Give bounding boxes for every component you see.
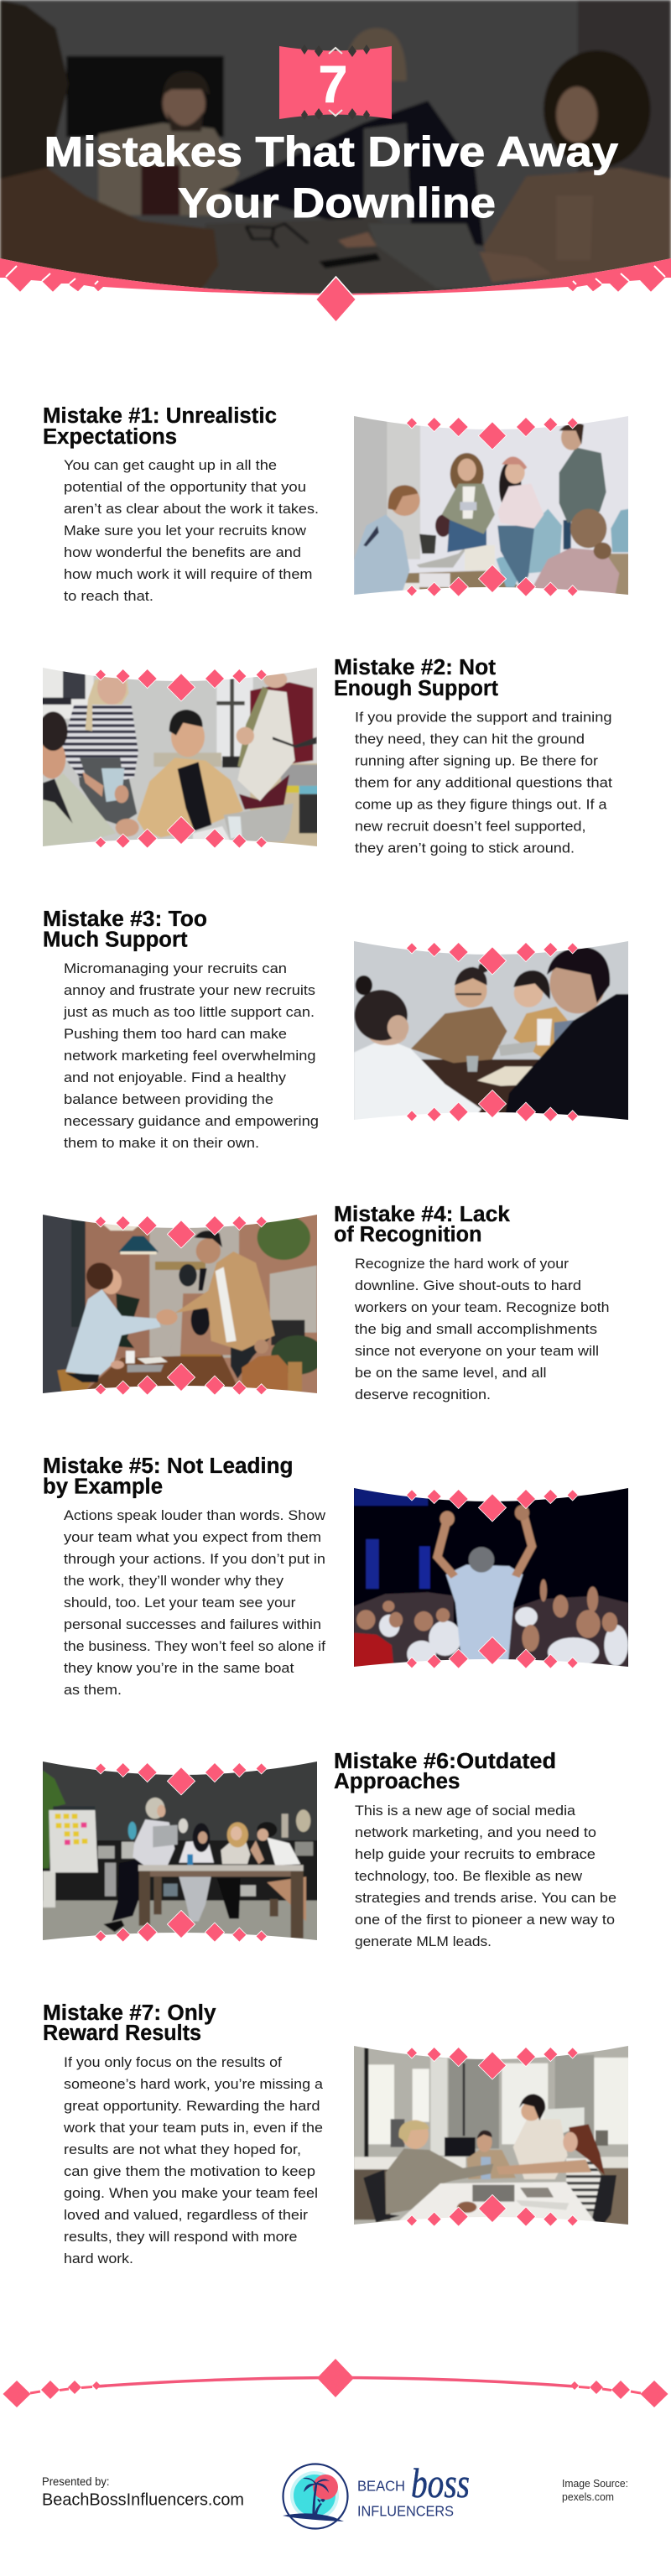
header curved band [0,258,671,295]
body text: mistake 1: how much work it will require of them [64,567,312,582]
icon: header centre diamond [317,278,356,321]
body text: mistake 1: Make sure you let your recruits know [64,523,306,539]
body text: mistake 3: necessary guidance and empowering [64,1114,319,1129]
body text: mistake 3: Micromanaging your recruits can [64,961,287,976]
logo wordmark [357,2459,470,2520]
body text: mistake 5: the work, they’ll wonder why they [64,1574,284,1589]
body text: mistake 5: your team what you expect from them [64,1530,321,1545]
body text: mistake 6: technology, too. Be flexible as new [355,1869,582,1884]
panel: mistake 1 [43,404,632,604]
photo: colleagues around a laptop [38,665,320,850]
body text: mistake 2: they aren’t going to stick around. [355,840,575,856]
body text: mistake 6: strategies and trends arise. You can be [355,1891,616,1906]
photo: team at a boardroom table [40,1759,320,1943]
body text: mistake 3: them to make it on their own. [64,1136,259,1151]
panel: mistake 3 [43,908,633,1151]
body text: mistake 6: one of the first to pioneer a new way to [355,1912,615,1928]
heading: mistake 2: Enough Support [334,677,498,700]
body text: mistake 7: someone’s hard work, you’re missing a [64,2077,324,2092]
heading: mistake 4 [334,1203,511,1246]
body text: mistake 6: help guide your recruits to embrace [355,1847,596,1862]
photo: business meeting at a table [349,938,633,1125]
photo: team talking in classroom [352,414,632,598]
body text: mistake 5: through your actions. If you don’t put in [64,1552,325,1567]
body text: mistake 6: This is a new age of social media [355,1803,576,1819]
body text: mistake 7: loved and valued, regardless of their [64,2208,309,2223]
body text: mistake 4: downline. Give shout-outs to hard [355,1278,581,1293]
body text: mistake 5: personal successes and failures within [64,1617,321,1632]
footer: image source: Image Source: [562,2478,628,2490]
body text: mistake 3 [63,961,319,1151]
photo: handshake in a cafe [40,1212,325,1397]
heading: mistake 5: Mistake #5: Not Leading [43,1455,294,1478]
photo: speaker facing a cheering crowd [349,1485,633,1672]
body text: mistake 4: deserve recognition. [355,1387,491,1402]
body text: mistake 2: come up as they figure things out. If a [355,797,608,812]
body text: mistake 3: Pushing them too hard can make [64,1027,287,1042]
header photo [0,0,671,294]
heading: mistake 7: Mistake #7: Only [43,2001,216,2025]
heading: mistake 3: Mistake #3: Too [43,908,207,931]
body text: mistake 3: just as much as too little support can. [63,1005,315,1020]
body text: mistake 2: them for any additional questions that [355,775,613,790]
body text: mistake 7: results, they will respond with more [64,2230,297,2245]
body text: mistake 3: annoy and frustrate your new recruits [64,983,315,998]
body text: mistake 7: work that your team puts in, even if the [63,2121,323,2136]
body text: mistake 1: potential of the opportunity that you [64,480,306,495]
body text: mistake 5: should, too. Let your team see your [64,1595,296,1611]
logo wordmark: INFLUENCERS [357,2503,454,2520]
heading: mistake 1: Mistake #1: Unrealistic [43,404,277,428]
panel: mistake 6 [40,1750,616,1949]
badge: number 7: 7 [319,56,347,114]
body text: mistake 6: generate MLM leads. [355,1934,492,1949]
body text: mistake 7: great opportunity. Rewarding the hard [64,2099,320,2114]
body text: mistake 4: the big and small accomplishments [355,1322,597,1337]
heading: mistake 5 [43,1455,294,1498]
body text: mistake 2: new recruit doesn’t feel supported, [355,819,585,834]
footer: presented by: Presented by: [42,2475,109,2488]
heading: mistake 7 [43,2001,216,2045]
body text: mistake 5: as them. [64,1683,122,1698]
divider with diamonds [3,2359,668,2407]
heading: mistake 6: Mistake #6:Outdated [334,1750,556,1773]
body text: mistake 1: to reach that. [64,589,153,604]
panel: mistake 5 [43,1455,633,1698]
body text: mistake 5: the business. They won’t feel so alone if [64,1639,326,1654]
body text: mistake 7: going. When you make your team feel [64,2186,318,2201]
body text: mistake 4: Recognize the hard work of your [355,1257,570,1272]
footer: presented by: BeachBossInfluencers.com [42,2490,244,2510]
logo wordmark: boss [411,2459,470,2506]
body text: mistake 7 [63,2055,324,2266]
body text: mistake 4: since not everyone on your team will [355,1344,599,1359]
photo: team collaborating in bright office [351,2043,631,2228]
body text: mistake 3: and not enjoyable. Find a healthy [64,1070,287,1085]
heading: mistake 4: Mistake #4: Lack [334,1203,511,1226]
heading: mistake 6 [334,1750,556,1793]
body text: mistake 7: hard work. [64,2251,133,2266]
body text: mistake 1: aren’t as clear about the work it takes. [64,502,319,517]
icon: palm tree in circle [283,2464,347,2528]
logo: Beach Boss Influencers [283,2459,470,2528]
body text: mistake 4 [354,1257,609,1402]
body text: mistake 6: network marketing, and you need to [355,1825,596,1840]
heading: mistake 1 [43,404,277,449]
body text: mistake 2: running after signing up. Be there for [355,753,599,768]
footer: presented by [42,2475,244,2510]
body text: mistake 2: If you provide the support and training [355,710,612,725]
body text: mistake 5: they know you’re in the same boat [64,1661,294,1676]
body text: mistake 5 [64,1508,326,1698]
body text: mistake 7: can give them the motivation to keep [64,2164,315,2179]
body text: mistake 7: If you only focus on the results of [64,2055,283,2070]
panel: mistake 4 [40,1203,609,1402]
body text: mistake 1: how wonderful the benefits are and [64,545,301,560]
panel: mistake 7 [43,2001,631,2266]
body text: mistake 1: You can get caught up in all the [64,458,277,473]
title: Your Downline [178,180,496,226]
heading: mistake 1: Expectations [43,425,177,449]
badge: number 7 [279,44,392,120]
body text: mistake 1 [64,458,319,604]
body text: mistake 5: Actions speak louder than words. Show [64,1508,325,1523]
body text: mistake 3: balance between providing the [64,1092,273,1107]
heading: mistake 4: of Recognition [334,1223,481,1246]
footer: image source: pexels.com [562,2491,614,2503]
heading: mistake 3: Much Support [43,928,188,951]
body text: mistake 3: network marketing feel overwhelming [64,1049,315,1064]
heading: mistake 7: Reward Results [43,2022,201,2045]
heading: mistake 6: Approaches [334,1770,460,1793]
heading: mistake 2: Mistake #2: Not [334,656,497,679]
footer: image source [562,2478,628,2503]
title [44,128,618,226]
body text: mistake 2: they need, they can hit the ground [355,731,585,747]
heading: mistake 3 [43,908,207,951]
body text: mistake 7: results are not what they hoped for, [64,2142,301,2157]
body text: mistake 2 [355,710,613,856]
logo wordmark: BEACH [357,2478,405,2495]
heading: mistake 2 [334,656,498,700]
body text: mistake 4: workers on your team. Recognize both [354,1300,609,1315]
body text: mistake 4: be on the same level, and all [355,1366,547,1381]
panel: mistake 2 [38,656,613,856]
heading: mistake 5: by Example [43,1475,163,1498]
body text: mistake 6 [355,1803,616,1949]
title: Mistakes That Drive Away [44,128,618,175]
